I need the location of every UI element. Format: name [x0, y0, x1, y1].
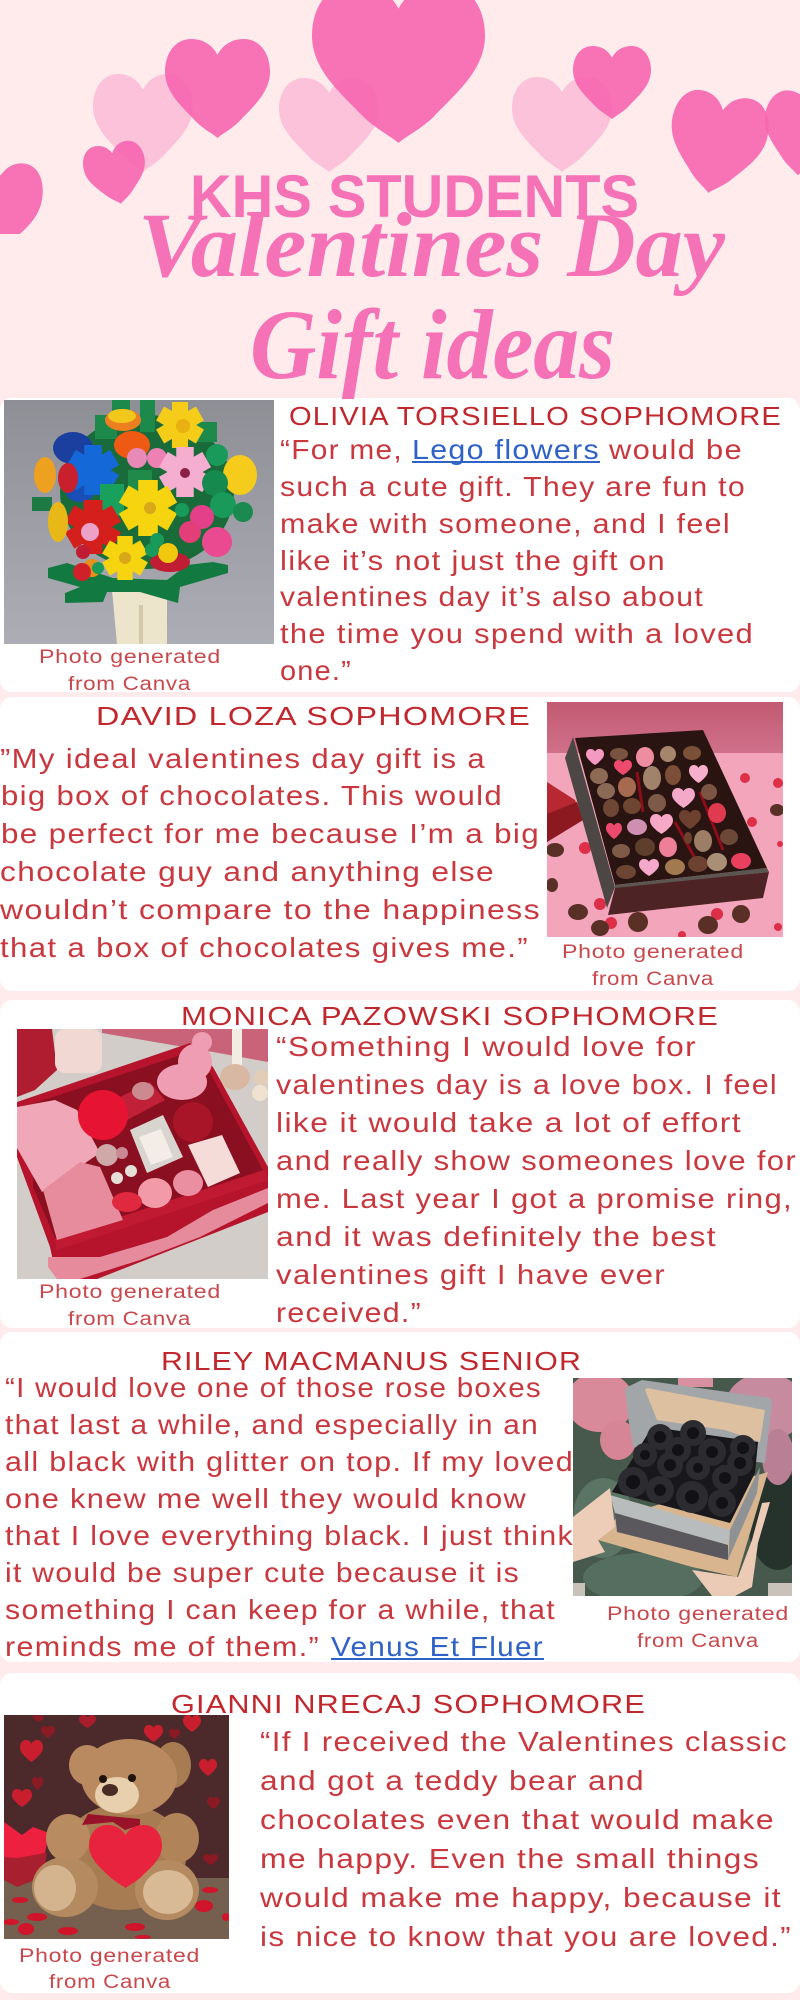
quote text: one.”: [280, 655, 352, 686]
quote text: is nice to know that you are loved.”: [260, 1921, 792, 1952]
quote text: valentines day is a love box. I feel: [276, 1069, 778, 1100]
panel: David Loza: [0, 697, 800, 991]
quote text: received.”: [276, 1297, 422, 1328]
panel: Riley Macmanus: [0, 1332, 800, 1662]
photo caption: Photo generated: [607, 1604, 789, 1625]
quote text: chocolate guy and anything else: [0, 856, 495, 887]
quote text: chocolates even that would make: [260, 1804, 775, 1835]
quote text: “I would love one of those rose boxes: [5, 1372, 542, 1403]
heading: DAVID LOZA SOPHOMORE: [96, 701, 531, 731]
photo caption: Photo generated: [39, 1282, 221, 1303]
heading: MONICA PAZOWSKI SOPHOMORE: [181, 1001, 719, 1031]
heading: OLIVIA TORSIELLO SOPHOMORE: [289, 401, 782, 431]
quote text: that a box of chocolates gives me.”: [0, 932, 529, 963]
panel: Olivia Torsiello: [0, 398, 800, 695]
quote text: [280, 434, 754, 686]
photo caption: [562, 942, 744, 990]
quote text: one knew me well they would know: [5, 1483, 527, 1514]
photo caption: Photo generated: [39, 647, 221, 668]
photo caption: [39, 1282, 221, 1330]
quote text: “If I received the Valentines classic: [260, 1726, 788, 1757]
title: KHS Students: KHS STUDENTS: [190, 163, 639, 230]
quote text: the time you spend with a loved: [280, 618, 754, 649]
photo caption: Photo generated: [562, 942, 744, 963]
heading: RILEY MACMANUS SENIOR: [161, 1346, 582, 1376]
quote text: that last a while, and especially in an: [5, 1409, 539, 1440]
panel: Gianni Nrecaj: [0, 1673, 800, 1993]
photo caption: from Canva: [637, 1631, 759, 1652]
photo caption: from Canva: [592, 969, 714, 990]
photo: teddy bear with heart: [4, 1715, 229, 1939]
photo caption: from Canva: [68, 674, 191, 695]
header hearts: [0, 0, 800, 274]
photo caption: from Canva: [68, 1309, 191, 1330]
quote text: ”My ideal valentines day gift is a: [0, 743, 486, 774]
quote text: like it’s not just the gift on: [280, 545, 666, 576]
quote text: make with someone, and I feel: [280, 508, 731, 539]
title: Gift ideas: Gift ideas: [250, 289, 615, 400]
quote text: [5, 1372, 574, 1662]
quote text: valentines day it’s also about: [280, 581, 704, 612]
quote text: and really show someones love for: [276, 1145, 797, 1176]
quote text: [276, 1031, 797, 1328]
photo caption: Photo generated: [19, 1946, 200, 1967]
quote text: like it would take a lot of effort: [276, 1107, 742, 1138]
photo caption: from Canva: [49, 1972, 171, 1993]
quote text: that I love everything black. I just think: [5, 1520, 574, 1551]
photo: Lego flower bouquet: [4, 400, 274, 644]
quote text: wouldn’t compare to the happiness: [0, 894, 541, 925]
quote text: would make me happy, because it: [259, 1882, 782, 1913]
photo: love box: [17, 1029, 268, 1279]
quote text: me happy. Even the small things: [260, 1843, 760, 1874]
panel: Monica Pazowski: [0, 1000, 800, 1330]
photo caption: [607, 1604, 789, 1652]
quote text: all black with glitter on top. If my loved: [5, 1446, 574, 1477]
quote text: and got a teddy bear and: [260, 1765, 645, 1796]
title: Valentines Day: Valentines Day: [138, 194, 726, 296]
quote text: would be: [608, 434, 743, 465]
quote text: big box of chocolates. This would: [1, 780, 503, 811]
photo: box of chocolates: [547, 702, 783, 937]
quote text: me. Last year I got a promise ring,: [276, 1183, 793, 1214]
quote text: such a cute gift. They are fun to: [280, 471, 746, 502]
photo: black rose box: [573, 1378, 792, 1596]
quote text: something I can keep for a while, that: [5, 1594, 556, 1625]
quote text: be perfect for me because I’m a big: [1, 818, 540, 849]
quote text: “For me,: [280, 434, 403, 465]
link: Venus Et Fluer: Venus Et Fluer: [331, 1631, 544, 1662]
photo caption: [39, 647, 221, 695]
quote text: reminds me of them.”: [5, 1631, 320, 1662]
link: Lego flowers: Lego flowers: [412, 434, 600, 465]
quote text: [0, 743, 541, 963]
quote text: and it was definitely the best: [276, 1221, 717, 1252]
quote text: “Something I would love for: [276, 1031, 697, 1062]
quote text: it would be super cute because it is: [5, 1557, 520, 1588]
quote text: [259, 1726, 792, 1952]
quote text: valentines gift I have ever: [276, 1259, 666, 1290]
photo caption: [19, 1946, 200, 1993]
heading: GIANNI NRECAJ SOPHOMORE: [171, 1689, 646, 1719]
